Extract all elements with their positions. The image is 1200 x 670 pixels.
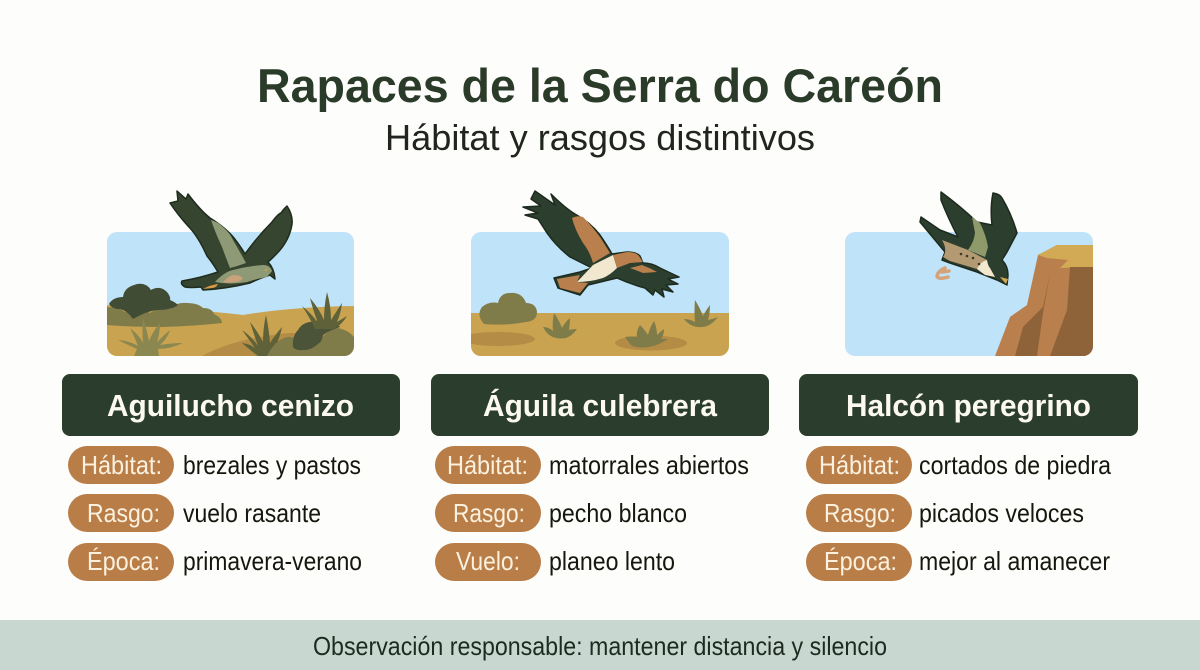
heading banner: Halcón peregrino — [846, 388, 1091, 423]
heading banner: Aguilucho cenizo — [107, 388, 354, 423]
panel: Águila culebrera card — [431, 374, 769, 581]
subtitle: Hábitat y rasgos distintivos — [385, 117, 815, 158]
heading banner — [62, 374, 400, 436]
row: Época: primavera-verano — [183, 546, 362, 576]
row: Rasgo: Rasgo: — [453, 498, 525, 528]
row: Hábitat: matorrales abiertos — [549, 450, 749, 480]
row: Vuelo: Vuelo: — [456, 546, 520, 576]
icon: halcón bird — [920, 192, 1017, 285]
panel: Aguilucho cenizo illustration — [107, 191, 354, 356]
footer band: Observación responsable: mantener distancia y silencio — [313, 631, 887, 661]
row: Rasgo: vuelo rasante — [183, 498, 321, 528]
panel: Aguilucho cenizo card — [62, 374, 400, 581]
row: Hábitat: cortados de piedra — [919, 450, 1111, 480]
row: Rasgo — [68, 494, 321, 532]
row: Época: mejor al amanecer — [919, 546, 1110, 576]
row: Rasgo — [806, 494, 1084, 532]
panel: Halcón peregrino card — [799, 374, 1138, 581]
row: Hábitat: brezales y pastos — [183, 450, 361, 480]
row: Vuelo — [435, 543, 675, 581]
heading banner — [431, 374, 769, 436]
row: Vuelo: planeo lento — [549, 546, 675, 576]
row: Época: Época: — [824, 546, 897, 576]
row: Rasgo — [435, 494, 687, 532]
row: Hábitat: Hábitat: — [819, 450, 900, 480]
row: Rasgo: Rasgo: — [824, 498, 896, 528]
icon: aguilucho bird — [170, 191, 292, 290]
row: Hábitat — [435, 446, 749, 484]
row: Rasgo: Rasgo: — [87, 498, 160, 528]
cliff — [995, 245, 1093, 356]
row: Rasgo: picados veloces — [919, 498, 1084, 528]
row: Hábitat — [806, 446, 1111, 484]
row: Hábitat — [68, 446, 361, 484]
row: Rasgo: pecho blanco — [549, 498, 687, 528]
heading banner — [799, 374, 1138, 436]
heading banner: Águila culebrera — [483, 388, 718, 423]
row: Hábitat: Hábitat: — [447, 450, 528, 480]
panel: Águila culebrera illustration — [461, 191, 729, 356]
title: Rapaces de la Serra do Careón — [257, 59, 943, 112]
icon: águila bird — [523, 191, 679, 297]
row: Época: Época: — [87, 546, 160, 576]
row: Época — [68, 543, 362, 581]
row: Hábitat: Hábitat: — [81, 450, 162, 480]
panel: Halcón peregrino illustration — [845, 192, 1093, 356]
footer band — [0, 620, 1200, 670]
row: Época — [806, 543, 1110, 581]
